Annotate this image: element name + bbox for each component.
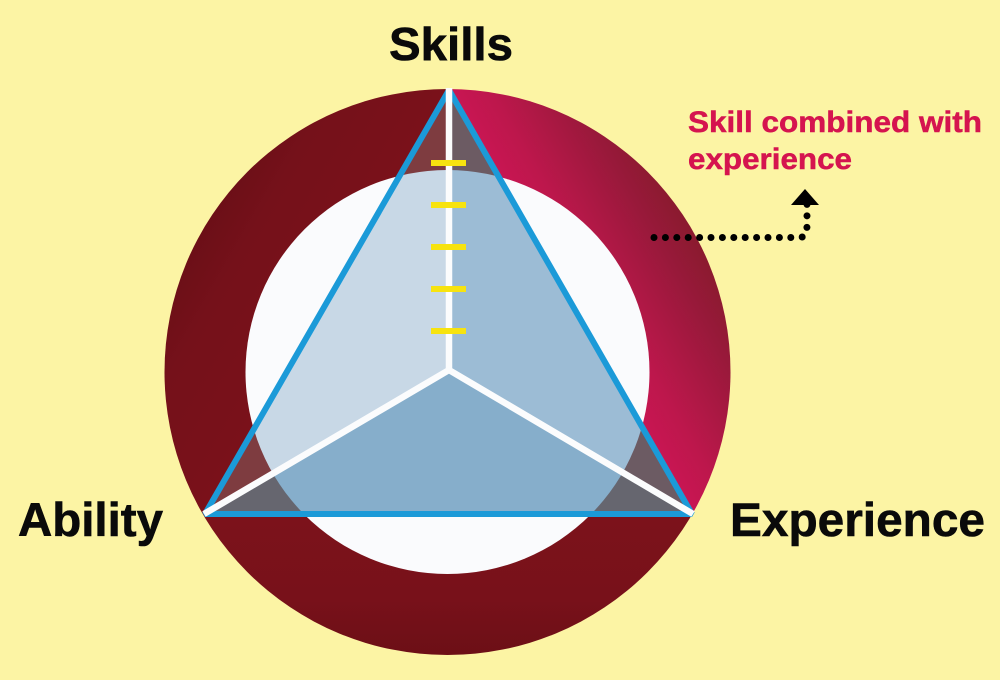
label: Ability: Ability: [18, 493, 163, 546]
ring segment: ability and experience (bottom): [202, 514, 690, 655]
label: Experience: Experience: [730, 493, 985, 546]
white inner circle: [246, 170, 650, 574]
sector: bottom, over ring: [205, 370, 692, 514]
yellow tick marks: [431, 163, 466, 331]
sector: left, over ring: [205, 90, 449, 514]
label: Skills: Skills: [389, 18, 513, 70]
ring diagram: [164, 89, 730, 655]
triangle outline: [205, 90, 692, 514]
arrow: dotted callout pointer: [654, 189, 819, 238]
sector: bottom, inside circle: [274, 374, 621, 511]
ring segment: ability and skill (left): [164, 89, 446, 514]
sector: left, inside circle: [255, 170, 446, 471]
white spokes: [204, 88, 693, 514]
callout text: experience: [688, 143, 852, 176]
triangle with three sectors: [204, 88, 693, 514]
ring segment: skill combined with experience (right): [452, 89, 730, 511]
callout text: Skill combined with: [688, 106, 982, 139]
sector: right, inside circle: [452, 170, 641, 470]
sector: right, over ring: [448, 90, 692, 514]
